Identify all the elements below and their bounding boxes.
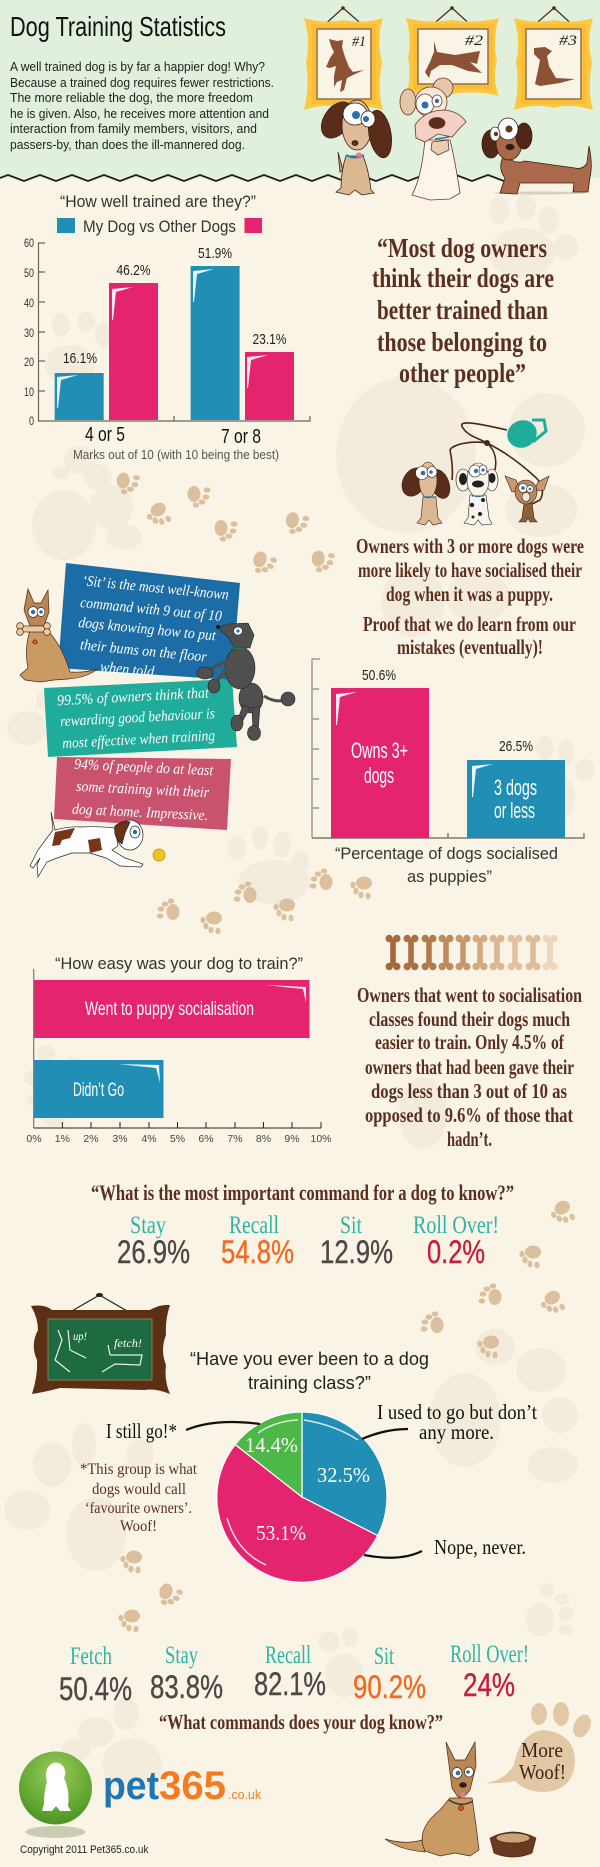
bar chart: how well trained: Marks out of 10 (with 10 being the best)	[73, 447, 279, 462]
quote: owners think their dogs are better: those belonging to	[377, 327, 547, 357]
stats: commands dogs know	[59, 1641, 529, 1734]
framed picture: dog number 1: #1	[352, 34, 366, 50]
bar chart: how easy to train: 1%	[55, 1133, 70, 1145]
bar chart: percentage of dogs socialised: Owns 3+	[351, 738, 408, 763]
illustration: shaggy dog	[400, 78, 466, 200]
note: favourite owners: Woof!	[120, 1518, 157, 1535]
text block: intro: The more reliable the dog, the more freedom	[10, 90, 253, 105]
stats: most important command: Sit	[340, 1212, 362, 1239]
stats: commands dogs know: Fetch	[70, 1643, 112, 1670]
pie chart: training class attendance: 53.1%	[256, 1521, 306, 1545]
stats: most important command	[91, 1180, 514, 1270]
callout: sit command	[58, 563, 240, 687]
speech bubble: more woof: Woof!	[519, 1760, 566, 1784]
pie chart: training class attendance: 32.5%	[317, 1463, 370, 1487]
bar chart: percentage of dogs socialised	[312, 659, 584, 886]
logo: pet365	[19, 1752, 261, 1838]
stats: commands dogs know: Recall	[265, 1642, 311, 1669]
bar chart: how easy to train: 6%	[198, 1133, 214, 1145]
bar chart: how easy to train: 8%	[256, 1133, 271, 1145]
panel: header	[0, 0, 600, 181]
framed picture: dog number 3	[514, 6, 593, 110]
bar chart: how well trained: 4 or 5	[85, 424, 125, 446]
note: favourite owners: dogs would call	[92, 1481, 187, 1498]
chart heading: dog training class: training class?”	[248, 1373, 371, 1393]
pie label: nope never	[364, 1535, 526, 1559]
pie label: used to go: I used to go but don’t	[377, 1400, 537, 1424]
bar chart: how easy to train: Went to puppy socialisation	[85, 999, 254, 1020]
text block: owners with 3 or more dogs	[356, 534, 584, 659]
chart heading: dog training class: “Have you ever been to a dog	[190, 1349, 429, 1369]
callout: training at home: 94% of people do at least	[74, 757, 214, 779]
stats: commands dogs know: 83.8%	[150, 1669, 223, 1705]
note: favourite owners: ‘favourite owners’.	[85, 1500, 192, 1517]
text block: intro: A well trained dog is by far a happier dog! Why?	[10, 59, 265, 74]
chart heading: how well trained: “How well trained are they?”	[60, 192, 256, 211]
bar chart: how well trained: 46.2%	[116, 262, 150, 279]
icon: blackboard	[31, 1293, 170, 1394]
title: Dog Training Statistics	[10, 11, 226, 42]
bar chart: how easy to train: Didn’t Go	[73, 1080, 124, 1101]
stats: most important command: 0.2%	[427, 1234, 485, 1270]
bar chart: how well trained: 60	[24, 236, 34, 250]
pie label: I still go	[106, 1419, 260, 1443]
pie label: nope never: Nope, never.	[434, 1535, 526, 1559]
bar chart: how well trained: 50	[24, 266, 34, 280]
text block: intro	[10, 59, 274, 152]
speech bubble: more woof	[486, 1702, 594, 1792]
note: favourite owners	[80, 1461, 198, 1535]
stats: most important command: Recall	[229, 1212, 279, 1239]
stats: commands dogs know: 24%	[463, 1667, 515, 1703]
stats: most important command: 26.9%	[117, 1234, 190, 1270]
bar chart: how well trained: 30	[24, 326, 34, 340]
pie label: used to go	[362, 1400, 537, 1444]
bar chart: how easy to train: 0%	[26, 1133, 42, 1145]
bar chart: percentage of dogs socialised: 50.6%	[362, 667, 396, 684]
bar chart: percentage of dogs socialised: 26.5%	[499, 738, 533, 755]
small paw print trail	[116, 472, 577, 1632]
speech bubble: more woof: More	[521, 1738, 563, 1762]
logo: pet365: .co.uk	[228, 1787, 261, 1802]
bar chart: how well trained: 7 or 8	[221, 426, 261, 448]
icon: blackboard: fetch!	[114, 1336, 142, 1350]
text block: intro: interaction from family members, visitors, and	[10, 121, 257, 136]
illustration: dog holding bone	[17, 589, 98, 682]
text block: socialisation classes: hadn’t.	[447, 1127, 492, 1151]
note: favourite owners: *This group is what	[80, 1461, 198, 1478]
framed picture: dog number 1	[304, 6, 383, 110]
bar chart: how well trained: 51.9%	[198, 245, 232, 262]
illustration: three dogs on a leash	[397, 415, 549, 525]
bar chart: how easy to train: 7%	[227, 1133, 243, 1145]
stats: commands dogs know: Sit	[374, 1643, 394, 1670]
copyright: Copyright 2011 Pet365.co.uk	[20, 1844, 149, 1856]
quote: owners think their dogs are better	[372, 233, 554, 388]
icon: row of ten bones	[386, 935, 558, 970]
pie label: used to go: any more.	[419, 1420, 494, 1444]
pie chart: training class attendance: 14.4%	[245, 1433, 298, 1457]
stats: commands dogs know: 50.4%	[59, 1671, 132, 1707]
stats: commands dogs know: 82.1%	[254, 1666, 326, 1702]
bar chart: percentage of dogs socialised: 3 dogs	[494, 775, 537, 800]
callout: sit command: their bums on the floor	[79, 637, 207, 666]
text block: intro: passers-by, than does the ill-mannered dog.	[10, 137, 245, 152]
bar chart: how well trained: 40	[24, 296, 34, 310]
bar chart: how easy to train: 2%	[83, 1133, 99, 1145]
framed picture: dog number 2: #2	[465, 33, 484, 49]
illustration: sitting dog and bowl	[385, 1742, 536, 1857]
callout: sit command: command with 9 out of 10	[80, 595, 223, 625]
bar chart: how well trained: 10	[24, 385, 34, 399]
bar chart: how easy to train: 10%	[310, 1133, 332, 1145]
quote: owners think their dogs are better: “Most dog owners	[377, 233, 547, 263]
illustration: dachshund	[482, 118, 591, 194]
bar chart: how easy to train: 5%	[170, 1133, 185, 1145]
callout: rewarding good behaviour: rewarding good behaviour is	[60, 706, 215, 730]
callout: sit command: when told..	[99, 659, 162, 681]
bar chart: percentage of dogs socialised: or less	[494, 798, 535, 823]
icon: blackboard: up!	[73, 1329, 87, 1343]
stats: commands dogs know: Roll Over!	[450, 1641, 529, 1668]
stats: most important command: 12.9%	[320, 1234, 393, 1270]
bar chart: how well trained: 23.1%	[252, 331, 286, 348]
bar chart: percentage of dogs socialised: as puppies”	[407, 867, 492, 886]
quote: owners think their dogs are better: better trained than	[377, 295, 548, 325]
framed picture: dog number 3: #3	[559, 33, 577, 49]
illustration: running dog and ball	[30, 812, 165, 877]
bar chart: how well trained: 0	[29, 414, 34, 428]
pie label: I still go: I still go!*	[106, 1419, 177, 1443]
stats: most important command: 54.8%	[221, 1234, 294, 1270]
bar chart: how easy to train: 4%	[141, 1133, 157, 1145]
stats: most important command: Stay	[130, 1212, 166, 1239]
bar chart: how well trained	[24, 236, 310, 462]
text block: socialisation classes	[357, 983, 582, 1151]
callout: rewarding good behaviour: most effective when training	[62, 728, 216, 752]
bar chart: how well trained: 20	[24, 355, 34, 369]
stats: most important command: Roll Over!	[413, 1212, 499, 1239]
stats: commands dogs know: “What commands does your dog know?”	[159, 1710, 443, 1734]
text block: intro: Because a trained dog requires fewer restrictions.	[10, 75, 274, 90]
callout: training at home: some training with their	[76, 779, 210, 801]
bar chart: how well trained: 16.1%	[63, 350, 97, 367]
stats: commands dogs know: 90.2%	[353, 1669, 426, 1705]
logo: pet365: pet	[103, 1764, 159, 1808]
callout: training at home: dog at home. Impressive.	[72, 802, 208, 824]
framed picture: dog number 2	[406, 6, 499, 96]
text block: intro: he is given. Also, he receives more attention and	[10, 106, 269, 121]
bar chart: how easy to train	[26, 954, 332, 1145]
quote: owners think their dogs are better: think their dogs are	[372, 263, 554, 293]
stats: commands dogs know: Stay	[165, 1642, 198, 1669]
text block: owners with 3 or more dogs: mistakes (eventually)!	[397, 635, 543, 659]
bar chart: how easy to train: “How easy was your dog to train?”	[55, 954, 303, 973]
chart heading: dog training class	[190, 1349, 429, 1393]
bar chart: how easy to train: 3%	[112, 1133, 128, 1145]
illustration: floppy eared dog	[315, 96, 395, 195]
bar chart: percentage of dogs socialised: “Percentage of dogs socialised	[335, 844, 558, 863]
logo: pet365: 365	[159, 1764, 226, 1808]
bar chart: how easy to train: 9%	[284, 1133, 300, 1145]
callout: rewarding good behaviour	[44, 679, 237, 757]
bar chart: percentage of dogs socialised: dogs	[364, 763, 394, 788]
quote: owners think their dogs are better: other people”	[399, 358, 526, 388]
illustration: poodle	[197, 623, 295, 740]
callout: sit command: dogs knowing how to put	[78, 615, 217, 644]
callout: sit command: ‘Sit’ is the most well-known	[82, 573, 230, 603]
callout: rewarding good behaviour: 99.5% of owners think that	[57, 685, 210, 709]
pie chart: training class attendance	[217, 1412, 387, 1582]
callout: training at home	[54, 757, 231, 830]
chart legend: My Dog vs Other Dogs	[83, 217, 236, 236]
